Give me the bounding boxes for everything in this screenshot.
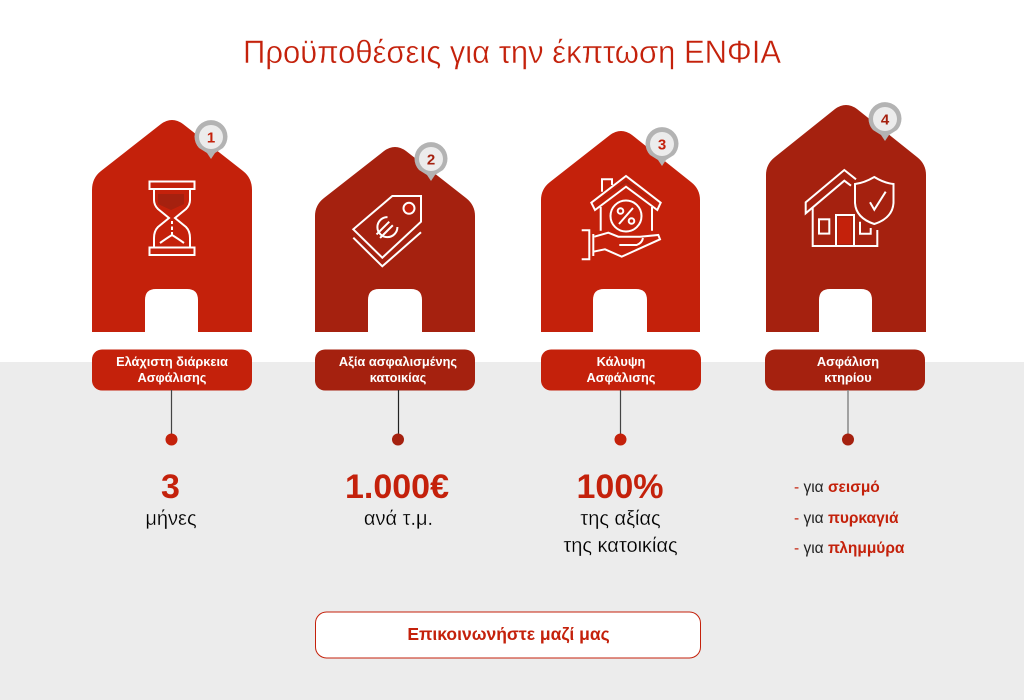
list of perils: - για πυρκαγιά (794, 510, 899, 527)
label 3: Ασφάλισης (587, 370, 656, 385)
label 4 (765, 350, 925, 390)
map pin 4: 4 (881, 112, 890, 128)
map pin 3: 3 (658, 136, 666, 154)
connector 2 (392, 390, 404, 446)
icon: hourglass (150, 182, 194, 255)
list of perils: - για σεισμό (794, 479, 880, 496)
panel: condition 3 insurance coverage (541, 127, 701, 557)
value 2: 1.000€ (345, 468, 449, 506)
value 1: μήνες (145, 508, 197, 530)
connector 1 (166, 390, 178, 446)
icon: house in hand with percent (582, 176, 661, 259)
label 4: κτηρίου (824, 370, 872, 385)
house shape 3 (541, 131, 700, 332)
value 1 (145, 468, 197, 530)
connector 3 (614, 390, 626, 446)
value 3: 100% (577, 468, 663, 506)
house shape 1 (92, 120, 252, 332)
title: Προϋποθέσεις για την έκπτωση ΕΝΦΙΑ (243, 34, 781, 70)
connector 4 (842, 390, 854, 446)
label 1 (92, 350, 252, 390)
house shape 2 (315, 147, 475, 332)
label 3: Κάλυψη (597, 354, 645, 369)
map pin 4 (869, 102, 902, 141)
map pin 2 (414, 142, 448, 181)
value 3: της κατοικίας (563, 535, 678, 557)
value 3: της αξίας (580, 508, 661, 530)
grey lower background (0, 362, 1024, 700)
value 2 (345, 468, 449, 530)
label 3 (541, 350, 701, 390)
list of perils: - για πλημμύρα (794, 540, 905, 557)
map pin 3 (646, 127, 678, 166)
label 1: Ελάχιστη διάρκεια (116, 354, 228, 369)
contact button: Επικοινωνήστε μαζί μας (407, 624, 610, 645)
value 2: ανά τ.μ. (364, 508, 433, 530)
contact button (316, 612, 700, 658)
map pin 1 (194, 120, 227, 159)
value 1: 3 (161, 468, 180, 506)
panel: condition 2 insured property value (315, 142, 475, 530)
panel: condition 4 building insurance (765, 102, 926, 557)
panel: condition 1 minimum insurance duration (92, 120, 252, 530)
house shape 4 (766, 105, 926, 332)
label 2: κατοικίας (370, 370, 427, 385)
list of perils (794, 479, 905, 557)
label 2 (315, 350, 475, 390)
map pin 1: 1 (207, 130, 215, 146)
icon: price tag with euro (353, 196, 421, 266)
map pin 2: 2 (427, 152, 435, 168)
label 1: Ασφάλισης (138, 370, 207, 385)
value 3 (563, 468, 678, 557)
icon: house with shield (806, 170, 894, 246)
label 4: Ασφάλιση (817, 354, 879, 369)
label 2: Αξία ασφαλισμένης (339, 354, 457, 369)
